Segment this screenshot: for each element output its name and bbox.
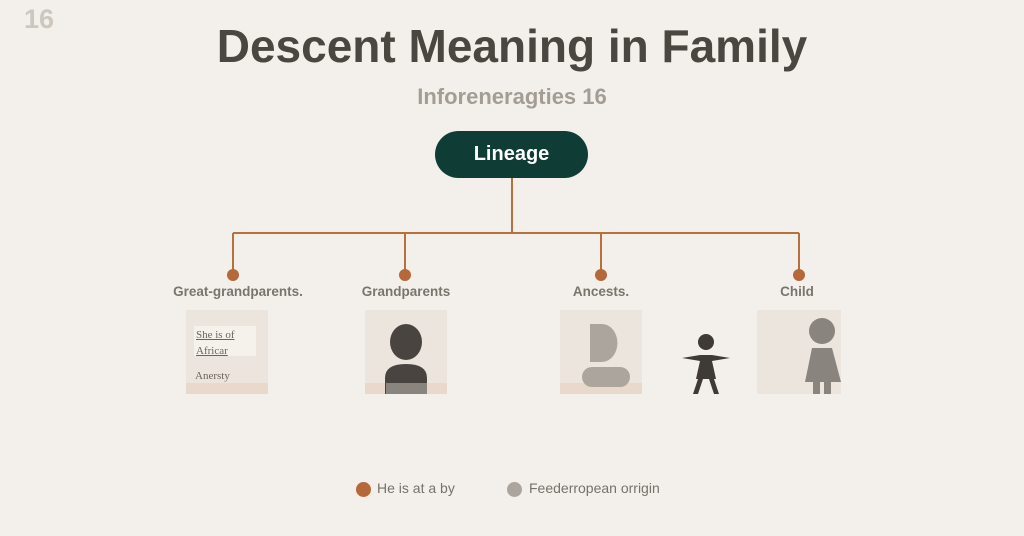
label: grandparents: Grandparents [362,284,450,299]
card: great-grandparents: Africar [196,345,228,357]
root node: Lineage [435,131,588,178]
card: child [757,310,841,394]
label: ancests: Ancests. [573,284,629,299]
card: great-grandparents: Anersty [195,370,230,382]
subtitle: Inforeneragties 16 [417,84,607,109]
legend item: gray: Feederropean orrigin [529,480,660,496]
card: great-grandparents [186,310,268,394]
icon: child figure [682,334,730,394]
title: Descent Meaning in Family [217,20,807,72]
legend [356,480,660,497]
card: grandparents [365,310,447,394]
card: ancests [560,310,642,394]
label: great-grandparents: Great-grandparents. [173,284,303,299]
root node: Lineage: Lineage [474,143,549,165]
legend item: orange: He is at a by [377,480,455,496]
card: great-grandparents: She is of [196,329,234,341]
page number: 16 [24,4,54,34]
label: child: Child [780,284,814,299]
